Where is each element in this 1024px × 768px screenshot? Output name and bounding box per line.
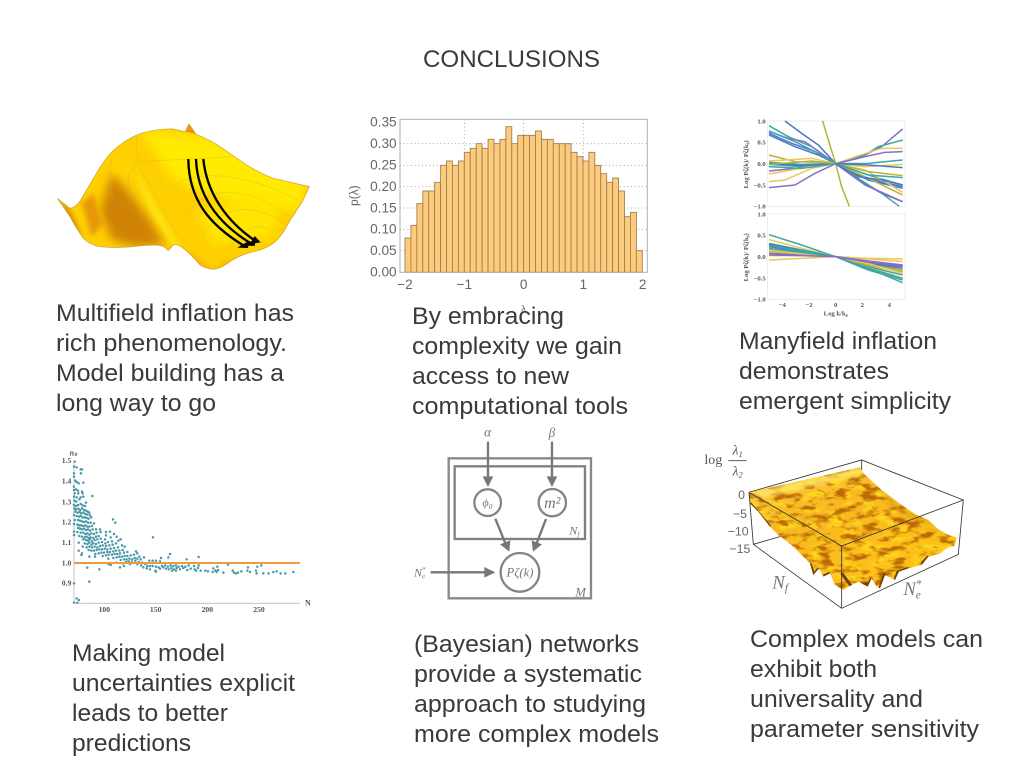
lower plot: −2 [805, 302, 813, 309]
axis titles: e [916, 589, 921, 601]
lower axis labels: −1.0 [754, 297, 766, 304]
text block: Bayesian networks: approach to studying [414, 691, 646, 718]
text block: embracing complexity: computational tools [412, 393, 628, 420]
text block: model uncertainties: Making model [72, 640, 225, 667]
lower axis labels: 1.0 [757, 211, 766, 218]
chart: manyfield power spectra [743, 118, 905, 318]
text block: complex models [750, 626, 983, 743]
axis labels [728, 488, 750, 556]
panel: multifield landscape surface [53, 120, 317, 273]
chart: scatter of spectral index vs N [62, 448, 311, 614]
surface [745, 463, 962, 593]
node labels: β [548, 425, 556, 440]
y axis labels: 1.1 [62, 538, 71, 547]
z axis title: λ [733, 463, 738, 478]
text block: complex models: parameter sensitivity [750, 716, 980, 743]
axis titles: N [305, 599, 311, 608]
lower plot: 4 [888, 302, 892, 309]
node m squared: m² [544, 495, 561, 512]
title: CONCLUSIONS [423, 46, 600, 73]
text block: Bayesian networks: more complex models [414, 721, 659, 748]
y axis title: p(λ) [347, 185, 361, 206]
plate M [449, 458, 591, 598]
lower plot: 2 [861, 302, 865, 309]
chart: 3D surface plot [704, 443, 963, 608]
axis titles: nₛ [70, 448, 78, 457]
x axis labels: 0 [520, 277, 528, 292]
text block: embracing complexity: complexity we gain [412, 333, 622, 360]
text block: manyfield inflation: Manyfield inflation [739, 328, 937, 355]
y axis labels: 1.5 [62, 456, 71, 465]
node labels: N [569, 523, 577, 537]
axis titles: N [903, 579, 916, 600]
axis titles: f [785, 581, 790, 595]
node phi0: ϕ₀ [482, 496, 493, 510]
data points [74, 462, 293, 603]
y axis labels [370, 115, 397, 279]
text block: multifield inflation [56, 300, 294, 417]
text block: complex models: Complex models can [750, 626, 983, 653]
chart: eigenvalue histogram [347, 115, 647, 314]
text block: embracing complexity: access to new [412, 363, 569, 390]
y axis labels: 0.10 [370, 222, 397, 237]
x axis labels [397, 277, 646, 292]
node labels: N [414, 565, 422, 579]
back box edges [749, 460, 963, 544]
z axis title: log [704, 453, 722, 468]
upper axis labels: 1.0 [757, 118, 766, 125]
text block: model uncertainties: leads to better [72, 700, 228, 727]
node phi0 [474, 489, 501, 516]
upper plot [743, 118, 905, 211]
plate Nf [455, 466, 585, 539]
x axis labels: −2 [397, 277, 413, 292]
lower axis labels [754, 211, 766, 304]
z axis title: λ [733, 443, 738, 458]
upper plot: Log Pζ(k)/ Pζ(k₀) [743, 140, 750, 188]
y axis labels: 1.2 [62, 518, 71, 527]
axis labels: −10 [728, 525, 749, 539]
text block: multifield inflation: Model building has a [56, 360, 284, 387]
x axis labels [99, 605, 265, 614]
upper axis labels: −0.5 [754, 182, 766, 189]
upper axis labels: 0.0 [757, 161, 766, 168]
x axis labels: −1 [457, 277, 472, 292]
text block: manyfield inflation [739, 328, 952, 415]
text block: manyfield inflation: demonstrates [739, 358, 889, 385]
y axis labels: 0.9 [62, 579, 71, 588]
y axis labels: 1.4 [62, 477, 71, 486]
axis labels: 0 [738, 488, 745, 502]
node labels: M [574, 585, 587, 599]
front box edges [749, 492, 963, 608]
axis titles [70, 448, 311, 608]
lower axis labels: 0.5 [757, 233, 766, 240]
axis titles: N [772, 572, 785, 593]
y axis labels: 0.05 [370, 243, 397, 258]
x axis labels: 100 [99, 605, 110, 614]
text block: embracing complexity [412, 303, 628, 420]
z axis title: 1 [738, 449, 743, 459]
text block: multifield inflation: rich phenomenology. [56, 330, 287, 357]
x axis labels: 1 [580, 277, 587, 292]
axes [74, 461, 300, 603]
lower plot: −4 [779, 302, 787, 309]
text block: manyfield inflation: emergent simplicity [739, 388, 952, 415]
axis titles: * [916, 579, 922, 591]
axis titles [771, 572, 922, 601]
text block: model uncertainties: predictions [72, 730, 191, 757]
node labels [413, 424, 587, 599]
x axis labels: 200 [202, 605, 213, 614]
text block: Bayesian networks: provide a systematic [414, 661, 642, 688]
z axis title: 2 [738, 470, 743, 480]
reference line [74, 560, 300, 566]
diagram: Bayesian network [413, 424, 591, 599]
text block: complex models: universality and [750, 686, 923, 713]
lower axis labels: −0.5 [754, 275, 766, 282]
y axis labels [62, 456, 71, 588]
node labels: * [422, 565, 426, 574]
x axis labels: 250 [253, 605, 265, 614]
text block: complex models: exhibit both [750, 656, 877, 683]
upper axis labels: 0.5 [757, 140, 766, 147]
lower plot: Log k/k₀ [824, 311, 848, 318]
arrows [431, 442, 557, 578]
node P zeta [501, 553, 539, 592]
node labels: e [422, 572, 426, 581]
lower plot [743, 211, 905, 318]
node labels: α [484, 424, 492, 439]
upper axis labels: −1.0 [754, 204, 766, 211]
y axis labels: 0.20 [370, 179, 397, 194]
x axis labels: 150 [150, 605, 162, 614]
lower axis labels: 0.0 [757, 254, 766, 261]
y axis labels: 0.15 [370, 200, 397, 215]
x axis labels: 2 [639, 277, 646, 292]
axis labels: −5 [733, 507, 747, 521]
node P zeta: Pζ(k) [506, 566, 533, 580]
y axis labels: 0.35 [370, 115, 397, 130]
axis labels: −15 [729, 542, 750, 556]
node labels: f [577, 530, 580, 539]
x axis title: λ [521, 304, 526, 314]
y axis labels: 0.30 [370, 136, 397, 151]
y axis labels: 0.25 [370, 157, 397, 172]
text block: model uncertainties [72, 640, 295, 757]
y axis labels: 0.00 [370, 264, 397, 279]
bars [405, 127, 642, 272]
y axis labels: 1.3 [62, 497, 71, 506]
icon: trajectory arrows [188, 159, 261, 248]
node m squared [539, 489, 566, 516]
upper axis labels [754, 118, 766, 211]
lower plot: Log Pζ(k)/ Pζ(k₀) [743, 233, 750, 281]
text block: model uncertainties: uncertainties explicit [72, 670, 295, 697]
text block: Bayesian networks [414, 631, 659, 748]
z axis title [704, 443, 747, 480]
text block: embracing complexity: By embracing [412, 303, 564, 330]
lower plot: 0 [834, 302, 838, 309]
y axis labels: 1.0 [62, 558, 71, 567]
text block: multifield inflation: Multifield inflation has [56, 300, 294, 327]
text block: multifield inflation: long way to go [56, 390, 216, 417]
text block: Bayesian networks: (Bayesian) networks [414, 631, 639, 658]
